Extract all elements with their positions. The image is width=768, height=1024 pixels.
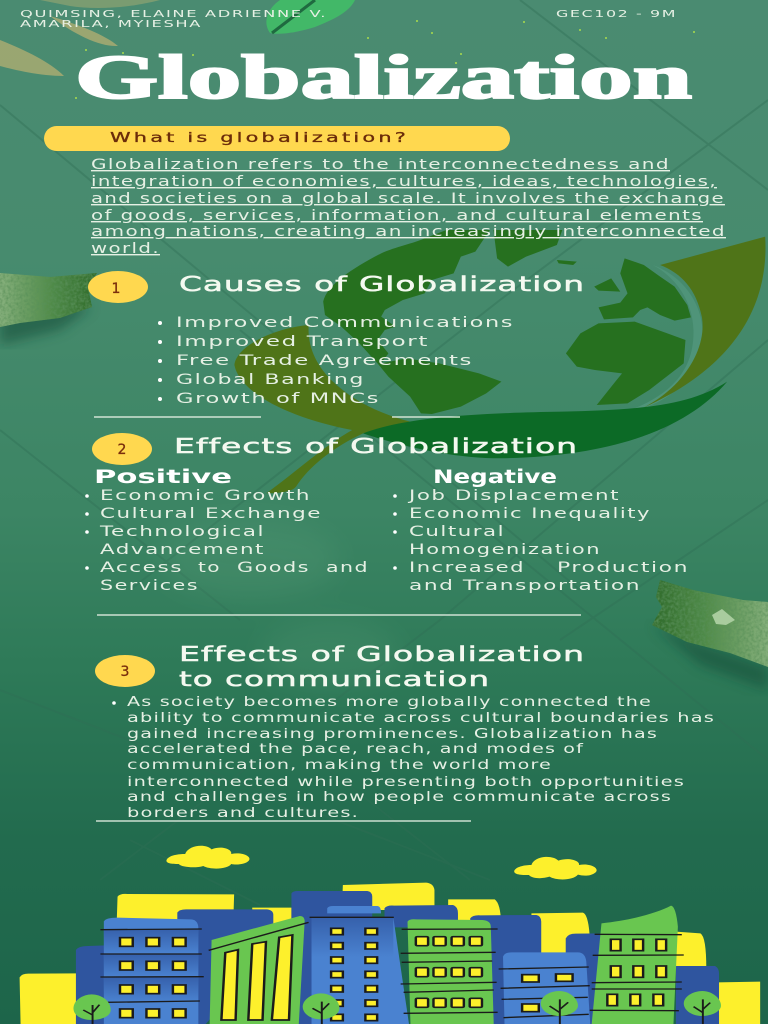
- causes list: Growth of MNCs: [176, 391, 380, 407]
- negative column: [393, 467, 689, 594]
- causes list: Improved Communications: [176, 315, 514, 331]
- olive leaf right: [642, 237, 766, 408]
- communication body: [112, 695, 715, 821]
- positive column: Economic Growth: [100, 488, 311, 504]
- green swoosh: [363, 382, 727, 458]
- positive column: Services: [100, 578, 199, 594]
- communication body: gained increasing prominences. Globalization has: [127, 727, 658, 742]
- header names: AMARILA, MYIESHA: [20, 19, 202, 30]
- what is globalization pill: What is globalization?: [110, 131, 409, 146]
- causes list: Free Trade Agreements: [176, 353, 473, 369]
- negative column: Increased: [409, 560, 525, 576]
- building 1: [100, 918, 204, 1024]
- definition paragraph: integration of economies, cultures, ideas, technologies,: [91, 174, 717, 190]
- building 5: [499, 952, 590, 1024]
- section 3: communication: [95, 642, 715, 821]
- communication body: ability to communicate across cultural boundaries has: [127, 711, 715, 726]
- positive column: [85, 467, 369, 594]
- positive column: Advancement: [100, 542, 265, 558]
- negative column: Economic Inequality: [409, 506, 651, 522]
- heading communication: Effects of Globalization: [179, 642, 585, 666]
- communication body: As society becomes more globally connected the: [127, 695, 652, 710]
- section 1: causes: [88, 271, 585, 407]
- number badge 1: 1: [112, 281, 120, 297]
- positive column: Technological: [98, 524, 265, 540]
- globe continents: [323, 230, 691, 414]
- section 2: effects: [85, 433, 689, 594]
- negative column: Job Displacement: [407, 488, 620, 504]
- communication body: accelerated the pace, reach, and modes of: [127, 742, 584, 757]
- yellow back buildings: [20, 883, 760, 1024]
- dark blue back buildings: [76, 891, 719, 1024]
- top green leaf: [266, 0, 355, 34]
- communication body: interconnected while presenting both opportunities: [127, 775, 685, 790]
- negative column: Cultural: [409, 524, 505, 540]
- number badge 2: 2: [118, 442, 126, 458]
- positive column: Positive: [94, 467, 232, 488]
- negative column: and Transportation: [409, 578, 641, 594]
- negative column: Production: [557, 560, 689, 576]
- building 3: [310, 906, 409, 1024]
- negative column: Negative: [433, 467, 557, 488]
- causes list: Global Banking: [176, 372, 365, 388]
- causes list: Improved Transport: [176, 334, 429, 350]
- heading communication: [179, 642, 585, 691]
- building 6: [590, 906, 684, 1024]
- positive column: Goods: [237, 560, 310, 576]
- definition paragraph: world.: [91, 241, 160, 257]
- number badge 3: 3: [121, 664, 129, 680]
- definition paragraph: and societies on a global scale. It involves the exchange: [91, 191, 725, 207]
- decorative leaves top left: [0, 0, 160, 76]
- heading causes: Causes of Globalization: [179, 272, 585, 296]
- trees: [73, 991, 721, 1024]
- definition paragraph: among nations, creating an increasingly interconnected: [91, 224, 726, 240]
- positive column: Cultural Exchange: [100, 506, 322, 522]
- positive column: to: [198, 560, 221, 576]
- header names: [20, 9, 327, 30]
- olive crescent left: [234, 325, 410, 493]
- positive column: Access: [100, 560, 183, 576]
- communication body: and challenges in how people communicate across: [127, 790, 672, 805]
- communication body: communication, making the world more: [127, 758, 552, 773]
- cityscape illustration: [20, 846, 760, 1024]
- number badge 2: [92, 433, 152, 465]
- title: Globalization: [75, 44, 692, 112]
- building 2: [209, 916, 309, 1024]
- negative column: Homogenization: [409, 542, 601, 558]
- definition paragraph: Globalization refers to the interconnectedness and: [91, 157, 670, 173]
- right photo leaf: [652, 580, 768, 690]
- building 4: [401, 919, 498, 1024]
- definition paragraph: of goods, services, information, and cultural elements: [91, 208, 703, 224]
- left photo leaf: [0, 273, 97, 345]
- number badge 3: [95, 655, 155, 687]
- course label: GEC102 - 9M: [556, 9, 677, 20]
- positive column: and: [326, 560, 369, 576]
- globe and leaf logo: [234, 230, 766, 493]
- globe ring: [635, 265, 703, 408]
- heading communication: to communication: [179, 667, 490, 691]
- causes list: [158, 315, 514, 407]
- clouds: [166, 846, 597, 879]
- heading effects: Effects of Globalization: [174, 434, 578, 458]
- communication body: borders and cultures.: [127, 806, 359, 821]
- number badge 1: [88, 271, 148, 303]
- definition paragraph: [91, 157, 726, 257]
- header names: QUIMSING, ELAINE ADRIENNE V.: [20, 9, 327, 20]
- what is globalization pill: [44, 126, 510, 151]
